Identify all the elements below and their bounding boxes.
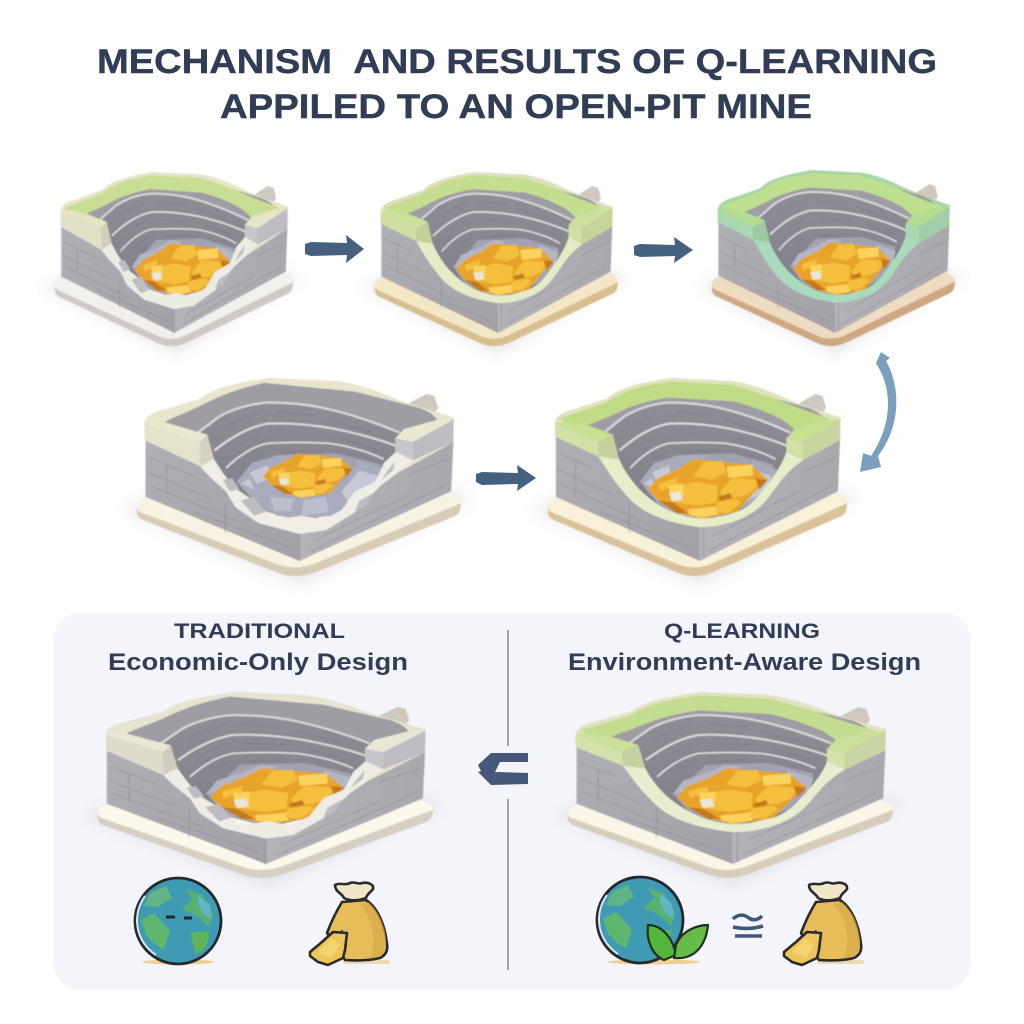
arrow: stage 1 to 2 [305,235,364,263]
icon: earth [135,878,221,964]
icon: money bag with leaf side [784,882,862,965]
divider [507,630,509,970]
mine stage 4 [122,378,471,586]
heading: traditional [108,620,408,676]
panel: comparison [54,613,970,990]
icon: money bag [310,882,388,965]
arrow: stage 2 to 3 [634,237,693,263]
leaf: right [674,925,708,958]
mine stage 3 [701,170,963,355]
heading: traditional: TRADITIONAL [174,620,345,643]
title: MECHANISM AND RESULTS OF Q-LEARNING [97,43,937,81]
curved arrow: stage 3 to 5 [860,352,896,472]
heading: q-learning [568,620,921,676]
icon: earth with leaves [597,877,708,964]
title: APPILED TO AN OPEN-PIT MINE [220,88,812,126]
heading: traditional: Economic-Only Design [108,649,408,676]
arrow: left [478,753,528,785]
arrow: stage 4 to 5 [476,465,536,491]
mine stage 5 [534,378,857,586]
mine: q-learning result [553,692,903,887]
mine stage 1 [44,172,301,355]
approximately equal symbol [733,915,763,936]
leaf: left [648,925,676,960]
mine stage 2 [364,172,626,355]
title [97,43,937,126]
heading: q-learning: Q-LEARNING [664,620,820,643]
heading: q-learning: Environment-Aware Design [568,649,921,676]
mine: traditional result [83,692,444,887]
